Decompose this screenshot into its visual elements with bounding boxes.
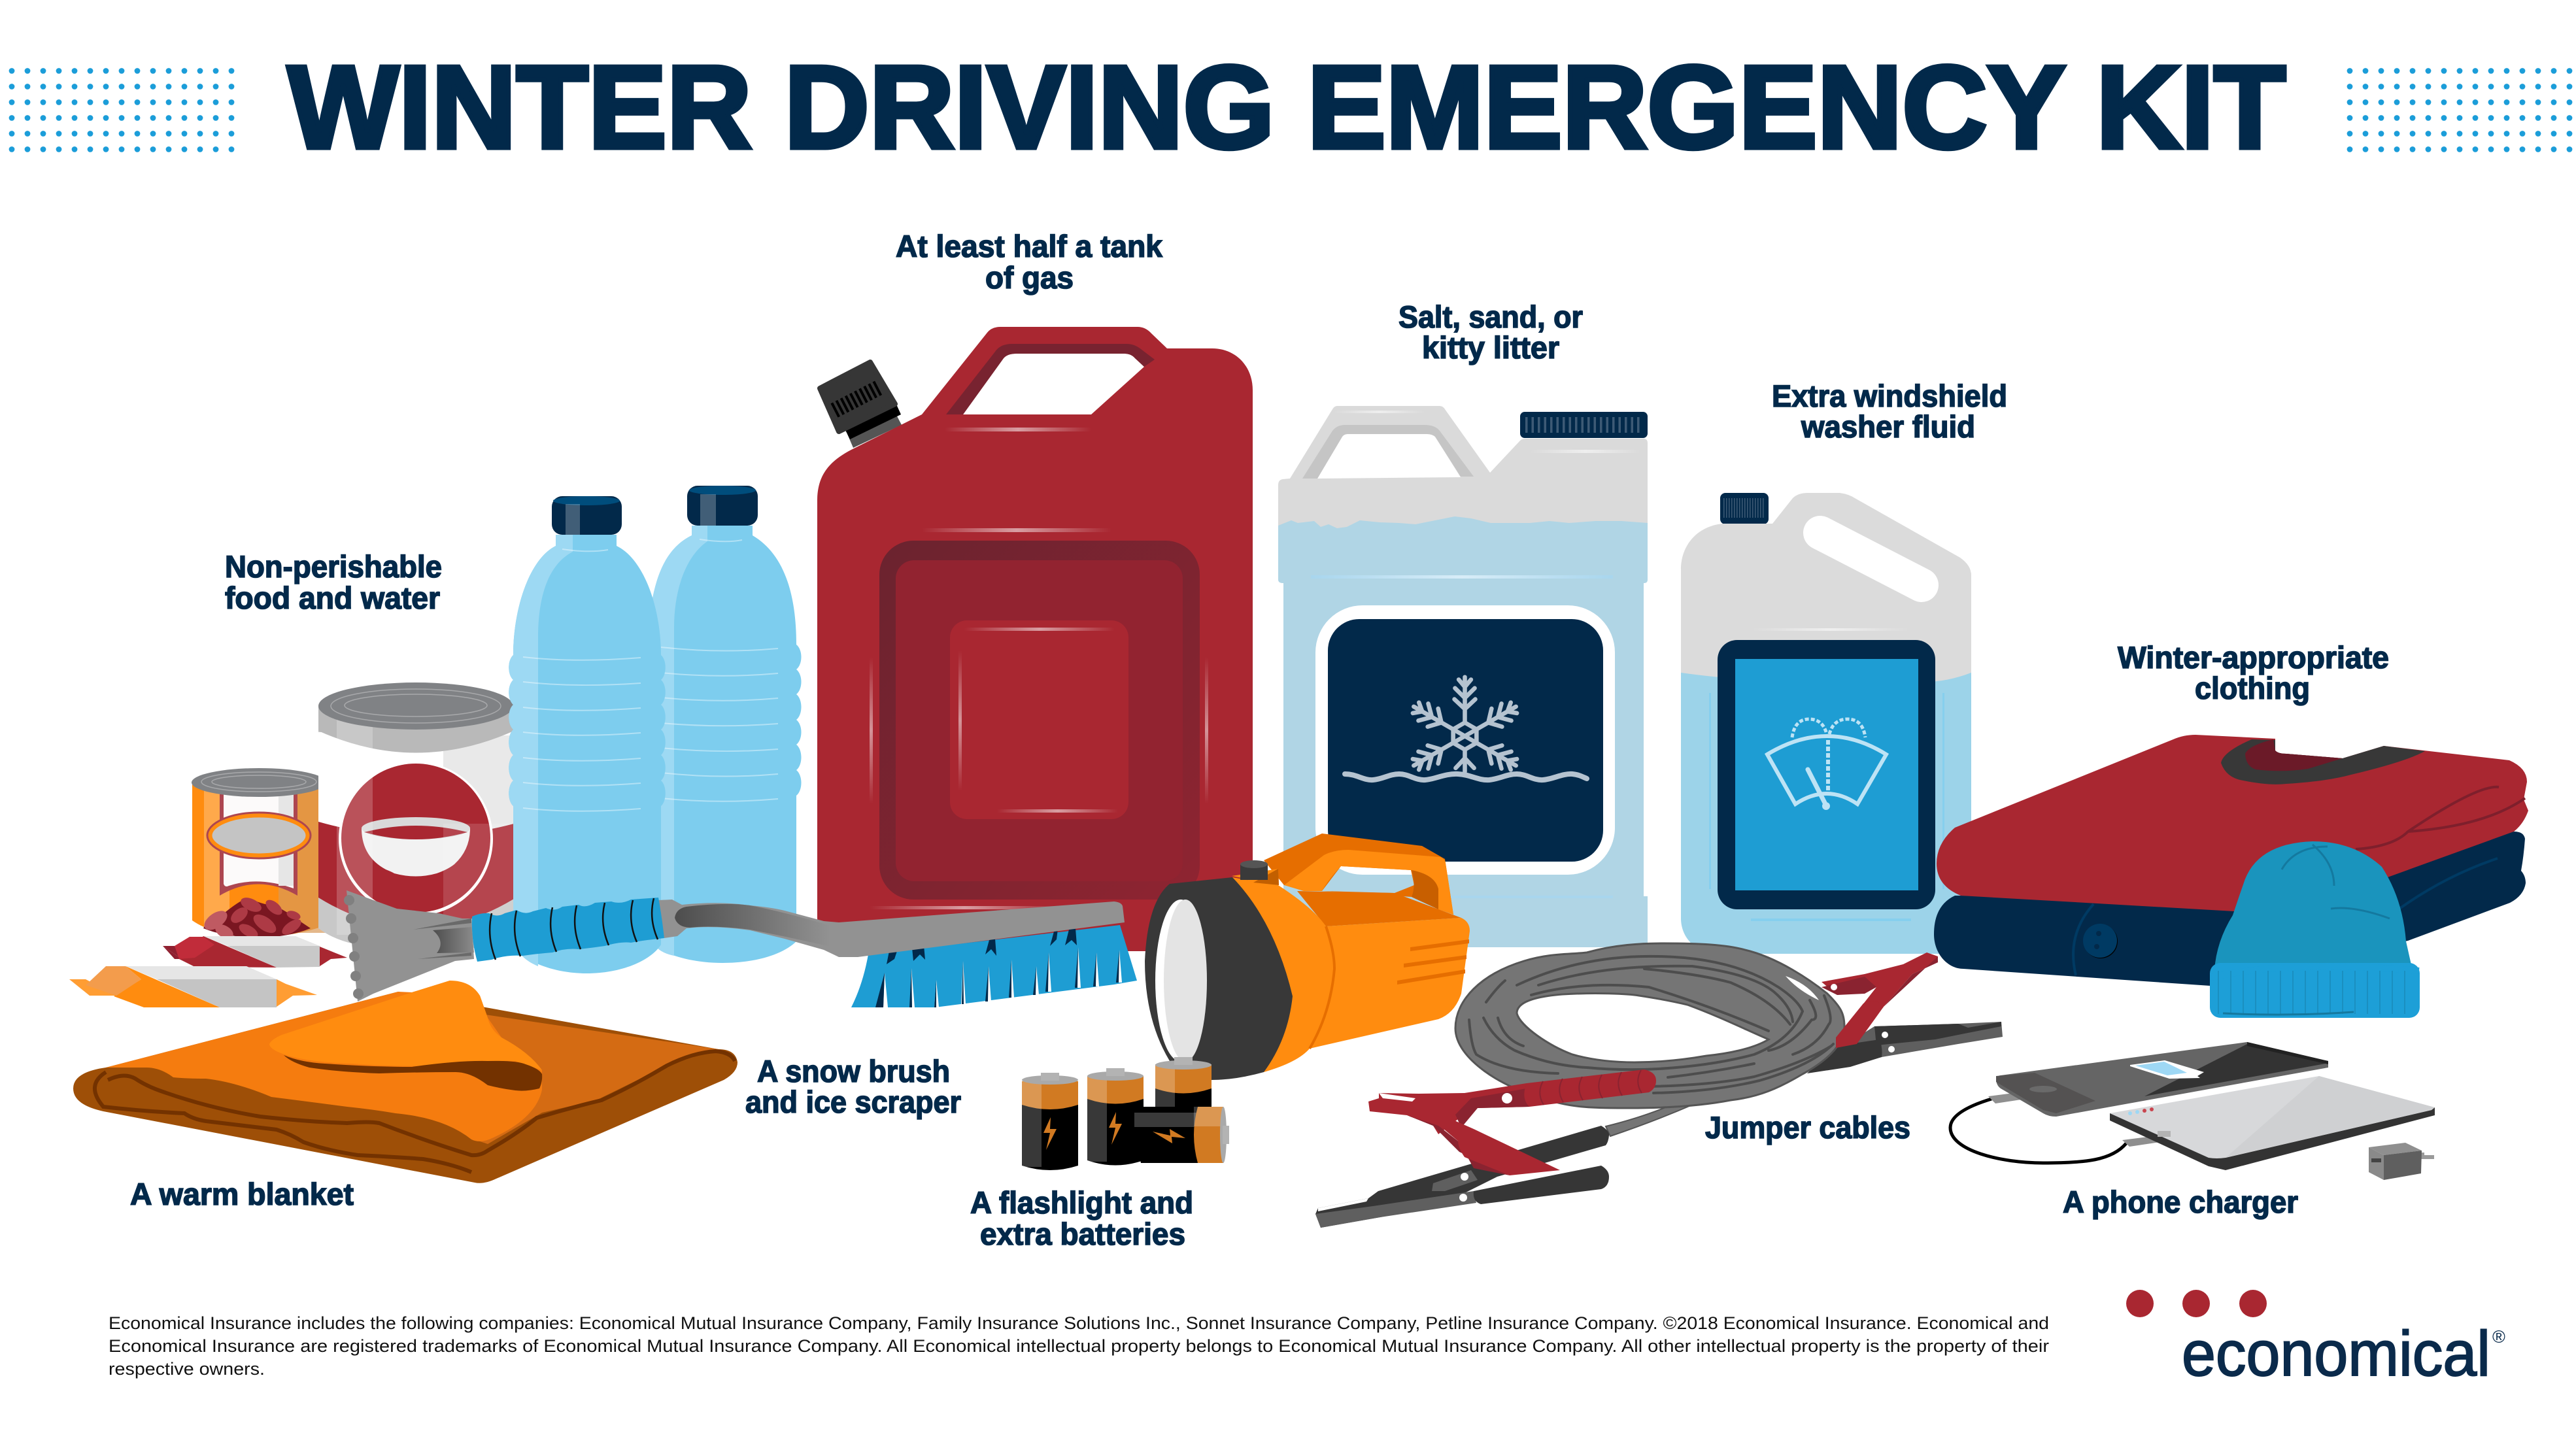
- logo: economical: economical: [2182, 1318, 2490, 1389]
- right black clamp: [1807, 1022, 2003, 1073]
- beanie: [2210, 841, 2420, 1018]
- right red clamp: [1822, 952, 1938, 1048]
- switch: [1232, 869, 1279, 885]
- label: non-perishable food and water: [225, 549, 442, 615]
- charging cable: [1950, 1099, 2126, 1163]
- label: a flashlight and extra batteries: A flashlight and: [970, 1185, 1193, 1220]
- rubber grip: [472, 898, 664, 962]
- label: non-perishable food and water: food and water: [225, 581, 440, 615]
- scraper blade: [344, 890, 474, 1002]
- logo: economical: ®: [2492, 1327, 2505, 1347]
- wave line: [1345, 774, 1587, 780]
- footer legal text: Economical Insurance includes the following companies: Economical Mutual Insurance Company, Family Insurance Solutions Inc., Sonnet Insurance Company, Petline Insurance Company. ©2018 Economical Insurance. Economical and: [109, 1313, 2049, 1333]
- right red grip: [1836, 1001, 1884, 1048]
- logo: economical: [2126, 1290, 2505, 1389]
- icon: salt jug: [1278, 406, 1648, 947]
- orange bar: [69, 966, 317, 1007]
- jug label: [1718, 640, 1935, 909]
- icon: batteries: [1022, 1057, 1229, 1170]
- wall plug: [2369, 1143, 2434, 1180]
- red sweater: [1937, 735, 2528, 911]
- icon: snowflake: [1408, 677, 1521, 775]
- icon: phone and power bank: [1950, 1042, 2435, 1180]
- label: a snow brush and ice scraper: and ice scraper: [745, 1085, 961, 1119]
- label: a warm blanket: A warm blanket: [130, 1177, 354, 1211]
- footer legal text: respective owners.: [109, 1359, 265, 1379]
- cable tail: [1606, 1090, 1725, 1136]
- navy sweater: [1934, 832, 2526, 986]
- icon: jumper cables: [1315, 943, 2003, 1228]
- shaft: [658, 900, 1125, 957]
- icon: food bars: [69, 936, 347, 1007]
- label: winter-appropriate clothing: Winter-appropriate: [2118, 640, 2389, 675]
- dot grid left: [4, 63, 239, 157]
- body: [1297, 891, 1461, 926]
- icon: small bean can: [192, 768, 331, 941]
- beans: [203, 898, 311, 937]
- bowl: [362, 828, 470, 876]
- bristles: [851, 925, 1137, 1007]
- left red clamp: [1368, 1069, 1656, 1175]
- left black clamp: [1315, 1126, 1609, 1228]
- label: salt, sand, or kitty litter: [1398, 299, 1583, 365]
- cable coil: [1455, 943, 1844, 1108]
- label: salt, sand, or kitty litter: kitty litter: [1422, 330, 1559, 365]
- label: a flashlight and extra batteries: [970, 1185, 1193, 1251]
- icon: red gas can: [817, 327, 1253, 951]
- footer legal text: Economical Insurance are registered trademarks of Economical Mutual Insurance Company. All Economical intellectual property belongs to Economical Mutual Insurance Company. All other intellectual property is the property of their: [109, 1336, 2049, 1356]
- icon: snow brush and ice scraper: [344, 890, 1137, 1007]
- icon: front water bottle: [509, 496, 666, 973]
- lens housing: [1145, 877, 1293, 1080]
- can label: [220, 794, 297, 896]
- jug label: [1315, 605, 1615, 875]
- icon: large soup can: [318, 682, 514, 948]
- handle: [1264, 833, 1453, 915]
- power bank: [2110, 1076, 2435, 1170]
- red bar: [163, 936, 347, 968]
- label: half a tank of gas: of gas: [985, 260, 1074, 295]
- label: extra windshield washer fluid: Extra windshield: [1772, 379, 2007, 413]
- icon: warm blanket: [73, 981, 737, 1183]
- icon: folded clothing: [1934, 735, 2528, 1018]
- label: a snow brush and ice scraper: A snow brush: [757, 1054, 950, 1088]
- label: a flashlight and extra batteries: extra batteries: [980, 1217, 1185, 1251]
- label: half a tank of gas: [896, 229, 1163, 295]
- icon: back water bottle: [649, 486, 802, 963]
- phone: [1988, 1042, 2328, 1117]
- footer legal text: [109, 1313, 2049, 1379]
- label: extra windshield washer fluid: washer fluid: [1801, 409, 1975, 444]
- title: WINTER DRIVING EMERGENCY KIT: [288, 42, 2286, 173]
- can recess: [879, 541, 1200, 900]
- label: half a tank of gas: At least half a tank: [896, 229, 1163, 263]
- label: non-perishable food and water: Non-perishable: [225, 549, 442, 584]
- lens: [1155, 900, 1206, 1062]
- icon: washer fluid jug: [1681, 493, 1971, 954]
- label: extra windshield washer fluid: [1772, 379, 2007, 444]
- label: winter-appropriate clothing: clothing: [2195, 671, 2310, 705]
- gas cap: [820, 362, 902, 448]
- label: jumper cables: Jumper cables: [1705, 1110, 1910, 1145]
- dot grid right: [2342, 63, 2576, 157]
- label: a snow brush and ice scraper: [745, 1054, 961, 1119]
- label: salt, sand, or kitty litter: Salt, sand, or: [1398, 299, 1583, 334]
- icon: flashlight: [1145, 833, 1470, 1080]
- label: a phone charger: A phone charger: [2063, 1185, 2298, 1219]
- label: winter-appropriate clothing: [2118, 640, 2389, 705]
- phone screen battery: [2130, 1060, 2204, 1079]
- jug cap: [1520, 412, 1648, 438]
- icon: windshield wiper: [1767, 719, 1886, 810]
